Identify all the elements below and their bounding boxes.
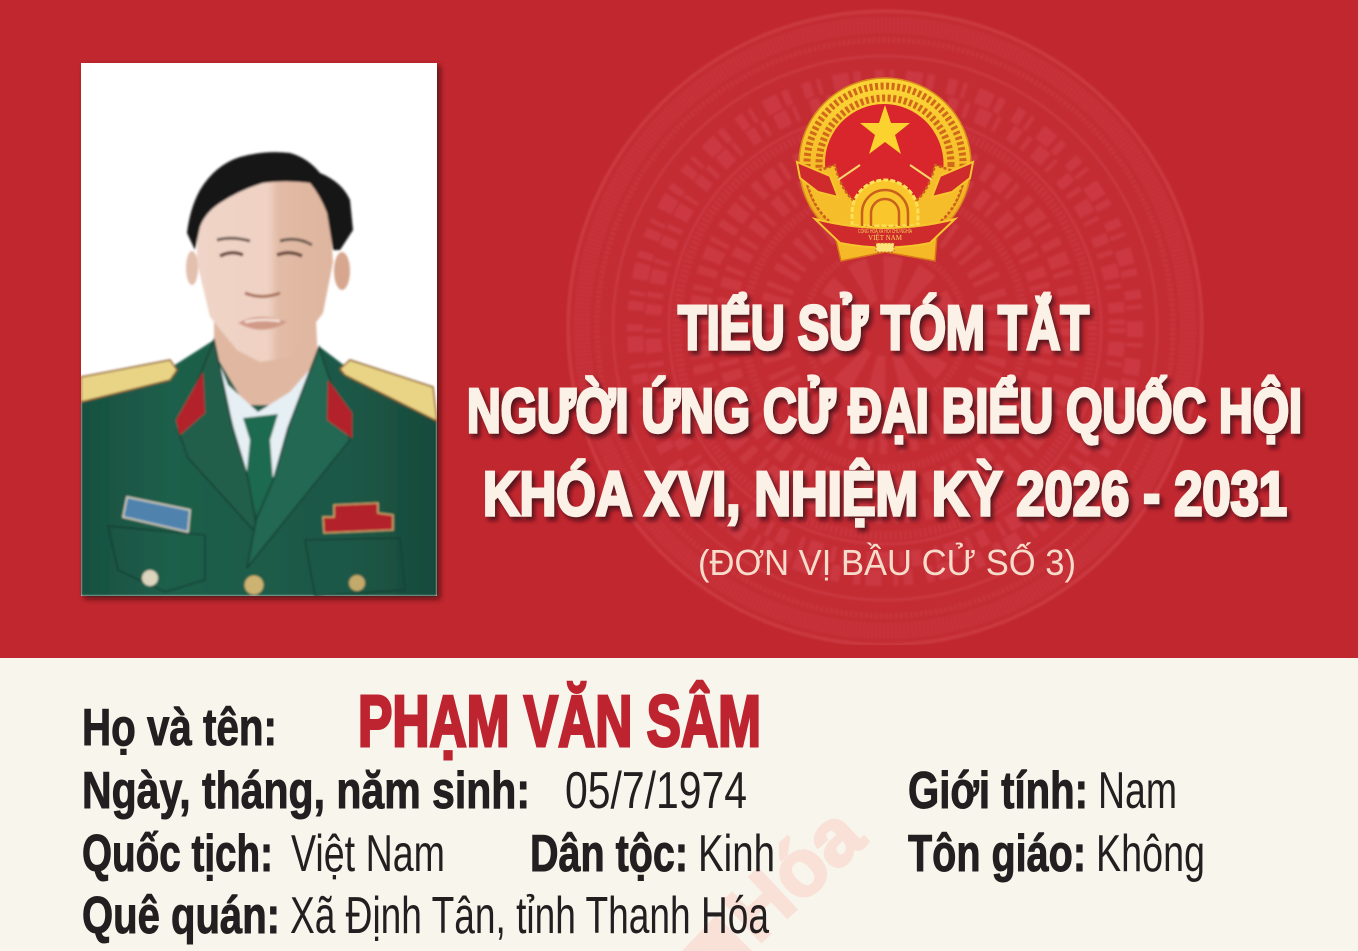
eyebrows	[217, 238, 312, 245]
gear	[852, 180, 918, 226]
watermark	[682, 789, 880, 951]
buttons	[142, 570, 158, 586]
gender label: Giới tính:	[908, 762, 1088, 820]
gender value: Nam	[1098, 762, 1177, 820]
title	[467, 294, 1302, 529]
eyes	[220, 253, 302, 256]
left epaulette	[81, 360, 177, 402]
bronze drum background pattern	[568, 11, 1202, 645]
motto text: CỘNG HÒA XÃ HỘI CHỦ NGHĨA	[858, 228, 912, 235]
base stripes	[876, 243, 894, 252]
wreath	[810, 88, 960, 238]
hometown label: Quê quán:	[82, 887, 280, 945]
state emblem of Vietnam	[797, 78, 973, 261]
neck	[214, 320, 318, 405]
gold star	[860, 105, 910, 154]
birth date label: Ngày, tháng, năm sinh:	[82, 762, 530, 820]
birth date value: 05/7/1974	[565, 762, 747, 820]
left lapel	[178, 340, 258, 535]
red header background	[0, 0, 1358, 658]
face	[197, 175, 333, 362]
candidate information	[82, 681, 1205, 945]
inner red field	[825, 104, 943, 222]
ethnicity value: Kinh	[698, 825, 775, 883]
subtitle: (ĐƠN VỊ BẦU CỬ SỐ 3)	[698, 541, 1076, 583]
nationality value: Việt Nam	[291, 825, 445, 883]
religion label: Tôn giáo:	[908, 825, 1086, 883]
star base	[835, 236, 937, 261]
medal ribbons	[323, 503, 393, 533]
rice sheaves	[805, 165, 965, 234]
grain stalks	[838, 165, 932, 180]
ethnicity label: Dân tộc:	[530, 825, 688, 883]
motto ribbon	[815, 219, 955, 248]
candidate name: PHẠM VĂN SÂM	[358, 681, 761, 762]
religion value: Không	[1096, 825, 1205, 883]
ears	[186, 251, 198, 285]
pockets	[108, 526, 405, 596]
title line 1: TIỂU SỬ TÓM TẮT	[678, 294, 1089, 363]
side ribbons	[797, 162, 973, 197]
name label: Họ và tên:	[82, 699, 277, 757]
nationality label: Quốc tịch:	[82, 825, 273, 883]
nose	[245, 293, 280, 296]
shirt	[218, 366, 310, 479]
portrait photo	[81, 63, 437, 596]
country text: VIỆT NAM	[868, 232, 902, 242]
hair	[187, 152, 353, 250]
right lapel	[247, 347, 350, 568]
jacket	[81, 340, 437, 596]
tie	[243, 414, 278, 516]
hometown value: Xã Định Tân, tỉnh Thanh Hóa	[290, 887, 769, 945]
name tag	[123, 497, 190, 532]
mouth	[238, 317, 287, 330]
right epaulette	[340, 360, 437, 421]
cream information background	[0, 658, 1358, 951]
watermark lower fragment	[682, 915, 752, 951]
collar tabs	[176, 372, 352, 438]
